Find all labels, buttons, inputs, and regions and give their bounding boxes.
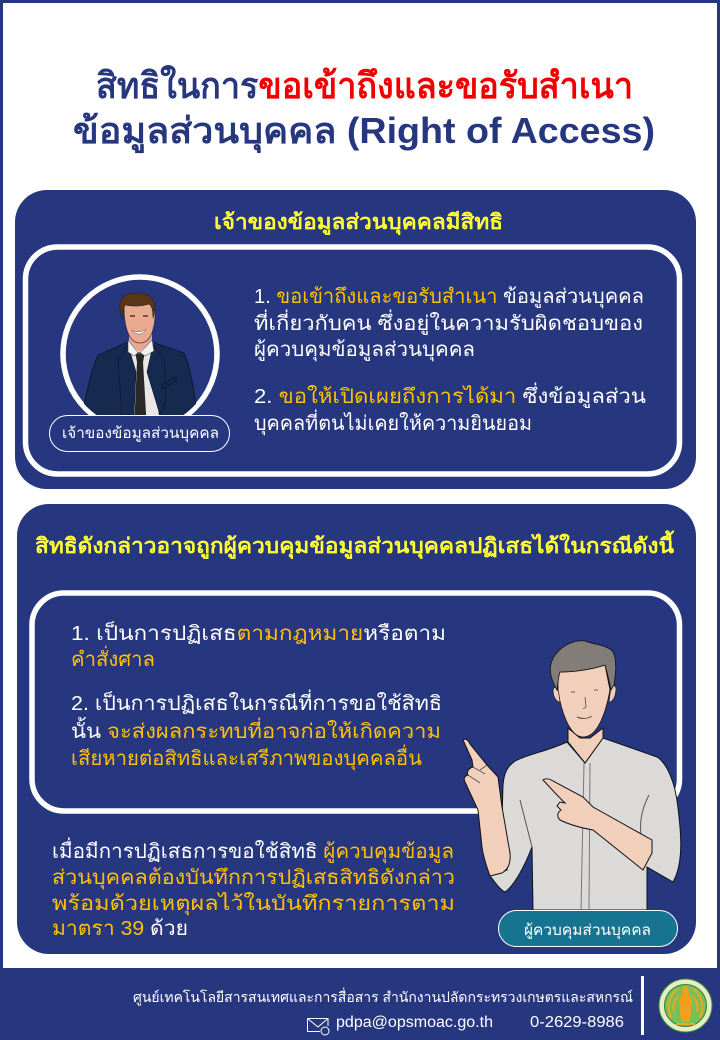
neck and collar	[568, 728, 603, 763]
text block: record note: ส่วนบุคคลต้องบันทึกการปฏิเสธสิทธิดังกล่าว	[52, 867, 455, 890]
pointing hand and forearm	[543, 779, 652, 870]
icon: data subject portrait	[63, 277, 217, 431]
title	[73, 64, 655, 154]
label: data subject	[50, 416, 230, 452]
text block: rights list: 2. ขอให้เปิดเผยถึงการได้มา ซึ่งข้อมูลส่วน	[254, 382, 646, 409]
divider	[641, 976, 644, 1035]
shirt	[490, 738, 681, 910]
text block: record note: เมื่อมีการปฏิเสธการขอใช้สิทธิ ผู้ควบคุมข้อมูล	[52, 837, 454, 864]
text block: record note: พร้อมด้วยเหตุผลไว้ในบันทึกรายการตาม	[52, 892, 455, 916]
email address: pdpa@opsmoac.go.th	[336, 1014, 493, 1031]
panel heading: เจ้าของข้อมูลส่วนบุคคลมีสิทธิ	[214, 210, 503, 236]
panel heading: สิทธิดังกล่าวอาจถูกผู้ควบคุมข้อมูลส่วนบุคคลปฏิเสธได้ในกรณีดังนี้	[35, 530, 675, 560]
face	[558, 665, 610, 737]
text block: rights list: 1. ขอเข้าถึงและขอรับสำเนา ข้อมูลส่วนบุคคล	[254, 286, 644, 309]
text block: record note: มาตรา 39 ด้วย	[52, 918, 188, 940]
text block: refusal grounds: คำสั่งศาล	[71, 645, 155, 671]
label: data controller	[498, 910, 678, 946]
text block: rights list: ที่เกี่ยวกับคน ซึ่งอยู่ในความรับผิดชอบของ	[254, 309, 643, 336]
inner frame	[32, 593, 680, 811]
organisation name: ศูนย์เทคโนโลยีสารสนเทศและการสื่อสาร สำนักงานปลัดกระทรวงเกษตรและสหกรณ์	[133, 988, 633, 1006]
panel: grounds for refusal	[17, 504, 696, 954]
text block: refusal grounds: นั้น จะส่งผลกระทบที่อาจก่อให้เกิดความ	[71, 717, 441, 743]
text block: refusal grounds: 1. เป็นการปฏิเสธ ตามกฎหมาย หรือตาม	[71, 620, 446, 645]
text block: rights list: ผู้ควบคุมข้อมูลส่วนบุคคล	[254, 339, 475, 362]
label: data controller: ผู้ควบคุมส่วนบุคคล	[524, 922, 651, 940]
footer	[0, 968, 720, 1040]
title: สิทธิในการขอเข้าถึงและขอรับสำเนา	[96, 64, 633, 106]
icon: data controller pointing	[463, 641, 681, 910]
icon: ministry seal	[659, 979, 712, 1032]
text block: refusal grounds	[71, 620, 446, 771]
text block: refusal grounds: เสียหายต่อสิทธิและเสรีภาพของบุคคลอื่น	[71, 744, 422, 771]
text block: refusal grounds: 2. เป็นการปฏิเสธในกรณีที่การขอใช้สิทธิ	[71, 689, 442, 715]
text block: rights list: บุคคลที่ตนไม่เคยให้ความยินยอม	[254, 409, 532, 436]
text block: record note	[52, 837, 455, 940]
raised hand and forearm	[463, 739, 510, 876]
text block: rights list	[254, 286, 646, 436]
phone number: 0-2629-8986	[530, 1014, 624, 1031]
label: data subject: เจ้าของข้อมูลส่วนบุคคล	[62, 425, 219, 443]
panel: data subject rights	[15, 190, 696, 489]
icon: email	[308, 1018, 329, 1035]
title: ข้อมูลส่วนบุคคล (Right of Access)	[73, 110, 655, 154]
inner frame	[26, 247, 680, 474]
